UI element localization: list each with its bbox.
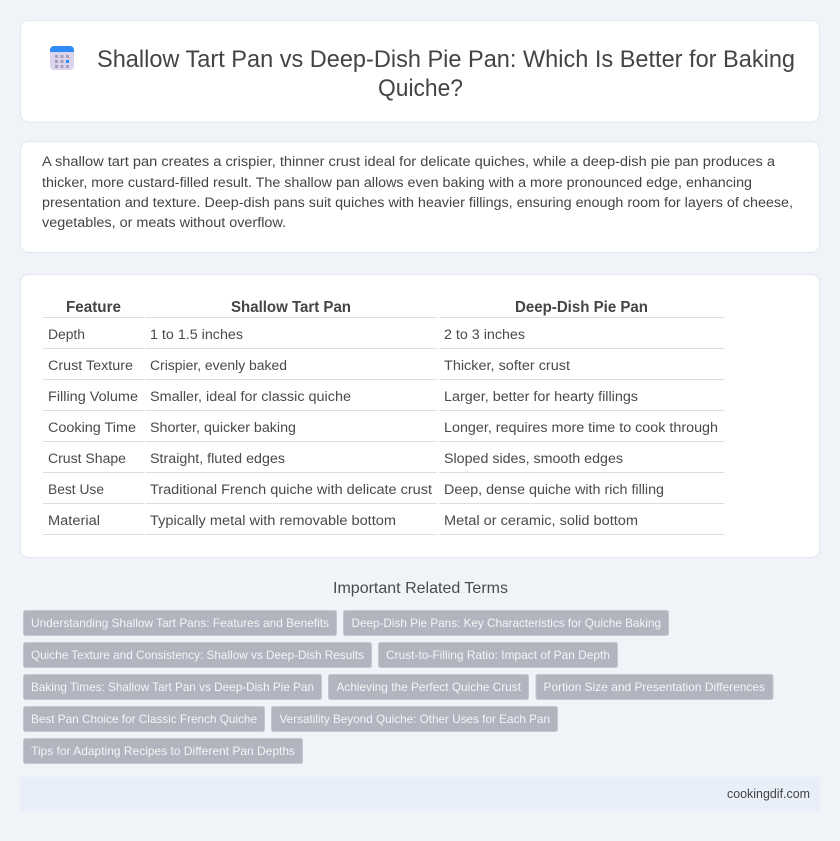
tag: Quiche Texture and Consistency: Shallow vs Deep-Dish Results (31, 648, 364, 662)
tag: Versatility Beyond Quiche: Other Uses for Each Pan (280, 712, 550, 726)
row: material: Typically metal with removable bottom (150, 513, 396, 529)
table header: Feature (66, 299, 121, 316)
tag: Achieving the Perfect Quiche Crust (336, 680, 522, 694)
row: crust shape (48, 451, 623, 467)
table header (66, 299, 648, 316)
title (97, 46, 795, 102)
row: crust texture: Thicker, softer crust (444, 358, 570, 374)
title: Shallow Tart Pan vs Deep-Dish Pie Pan: Which Is Better for Baking (97, 46, 795, 73)
tag (328, 674, 528, 700)
text block: description: A shallow tart pan creates a crispier, thinner crust ideal for delicate quiches, while a deep-dish pie pan produces a (42, 154, 775, 170)
text block: description: presentation and texture. Deep-dish pans suit quiches with heavier fillings, ensuring enough room for layers of cheese, (42, 195, 793, 211)
row: cooking time: Longer, requires more time to cook through (444, 420, 718, 436)
text block: description: thicker, more custard-filled result. The shallow pan allows even baking with a more pronounced edge, enhancing (42, 175, 752, 191)
row: depth: 1 to 1.5 inches (150, 327, 243, 343)
tag (272, 706, 558, 732)
row: depth (48, 327, 525, 343)
row: best use: Best Use (48, 482, 104, 498)
row: cooking time (48, 420, 718, 436)
panel: title card (20, 20, 820, 122)
tag: Baking Times: Shallow Tart Pan vs Deep-Dish Pie Pan (31, 680, 314, 694)
text block: description (42, 154, 793, 231)
row: material (48, 513, 638, 529)
row: best use (48, 482, 664, 498)
footer: cookingdif.com (727, 786, 810, 801)
tag (24, 738, 302, 764)
row: cooking time: Cooking Time (48, 420, 136, 436)
row: depth: Depth (48, 327, 85, 343)
tag (344, 610, 668, 636)
row: best use: Deep, dense quiche with rich filling (444, 482, 664, 498)
tag (24, 706, 264, 732)
icon: calendar (50, 46, 74, 70)
tag: Portion Size and Presentation Differences (544, 680, 765, 694)
row: best use: Traditional French quiche with delicate crust (150, 482, 432, 498)
tag (378, 642, 618, 668)
row: filling volume (48, 389, 638, 405)
panel: comparison table (20, 274, 820, 558)
footer (20, 777, 820, 811)
text block: description: vegetables, or meats without overflow. (42, 215, 286, 231)
panel: description (20, 142, 820, 252)
row: crust shape: Crust Shape (48, 451, 126, 467)
tag: Understanding Shallow Tart Pans: Features and Benefits (31, 616, 329, 630)
heading: related terms: Important Related Terms (333, 580, 508, 597)
row: cooking time: Shorter, quicker baking (150, 420, 296, 436)
tag: Deep-Dish Pie Pans: Key Characteristics for Quiche Baking (352, 616, 661, 630)
row: crust shape: Sloped sides, smooth edges (444, 451, 623, 467)
table header: Shallow Tart Pan (231, 299, 351, 316)
table rules (43, 317, 724, 535)
tag: Best Pan Choice for Classic French Quiche (31, 712, 257, 726)
title: Quiche? (378, 75, 463, 102)
row: material: Material (48, 513, 100, 529)
tag (24, 642, 372, 668)
tag (24, 610, 336, 636)
row: crust shape: Straight, fluted edges (150, 451, 285, 467)
tag: Tips for Adapting Recipes to Different Pan Depths (31, 744, 295, 758)
row: filling volume: Larger, better for hearty fillings (444, 389, 638, 405)
row: crust texture (48, 358, 570, 374)
row: filling volume: Smaller, ideal for classic quiche (150, 389, 351, 405)
table header: Deep-Dish Pie Pan (515, 299, 648, 316)
row: crust texture: Crispier, evenly baked (150, 358, 287, 374)
row: material: Metal or ceramic, solid bottom (444, 513, 638, 529)
tag (24, 674, 322, 700)
tag: Crust-to-Filling Ratio: Impact of Pan Depth (386, 648, 610, 662)
row: depth: 2 to 3 inches (444, 327, 525, 343)
tag (536, 674, 773, 700)
tag list: related terms (24, 610, 773, 764)
row: filling volume: Filling Volume (48, 389, 138, 405)
row: crust texture: Crust Texture (48, 358, 133, 374)
